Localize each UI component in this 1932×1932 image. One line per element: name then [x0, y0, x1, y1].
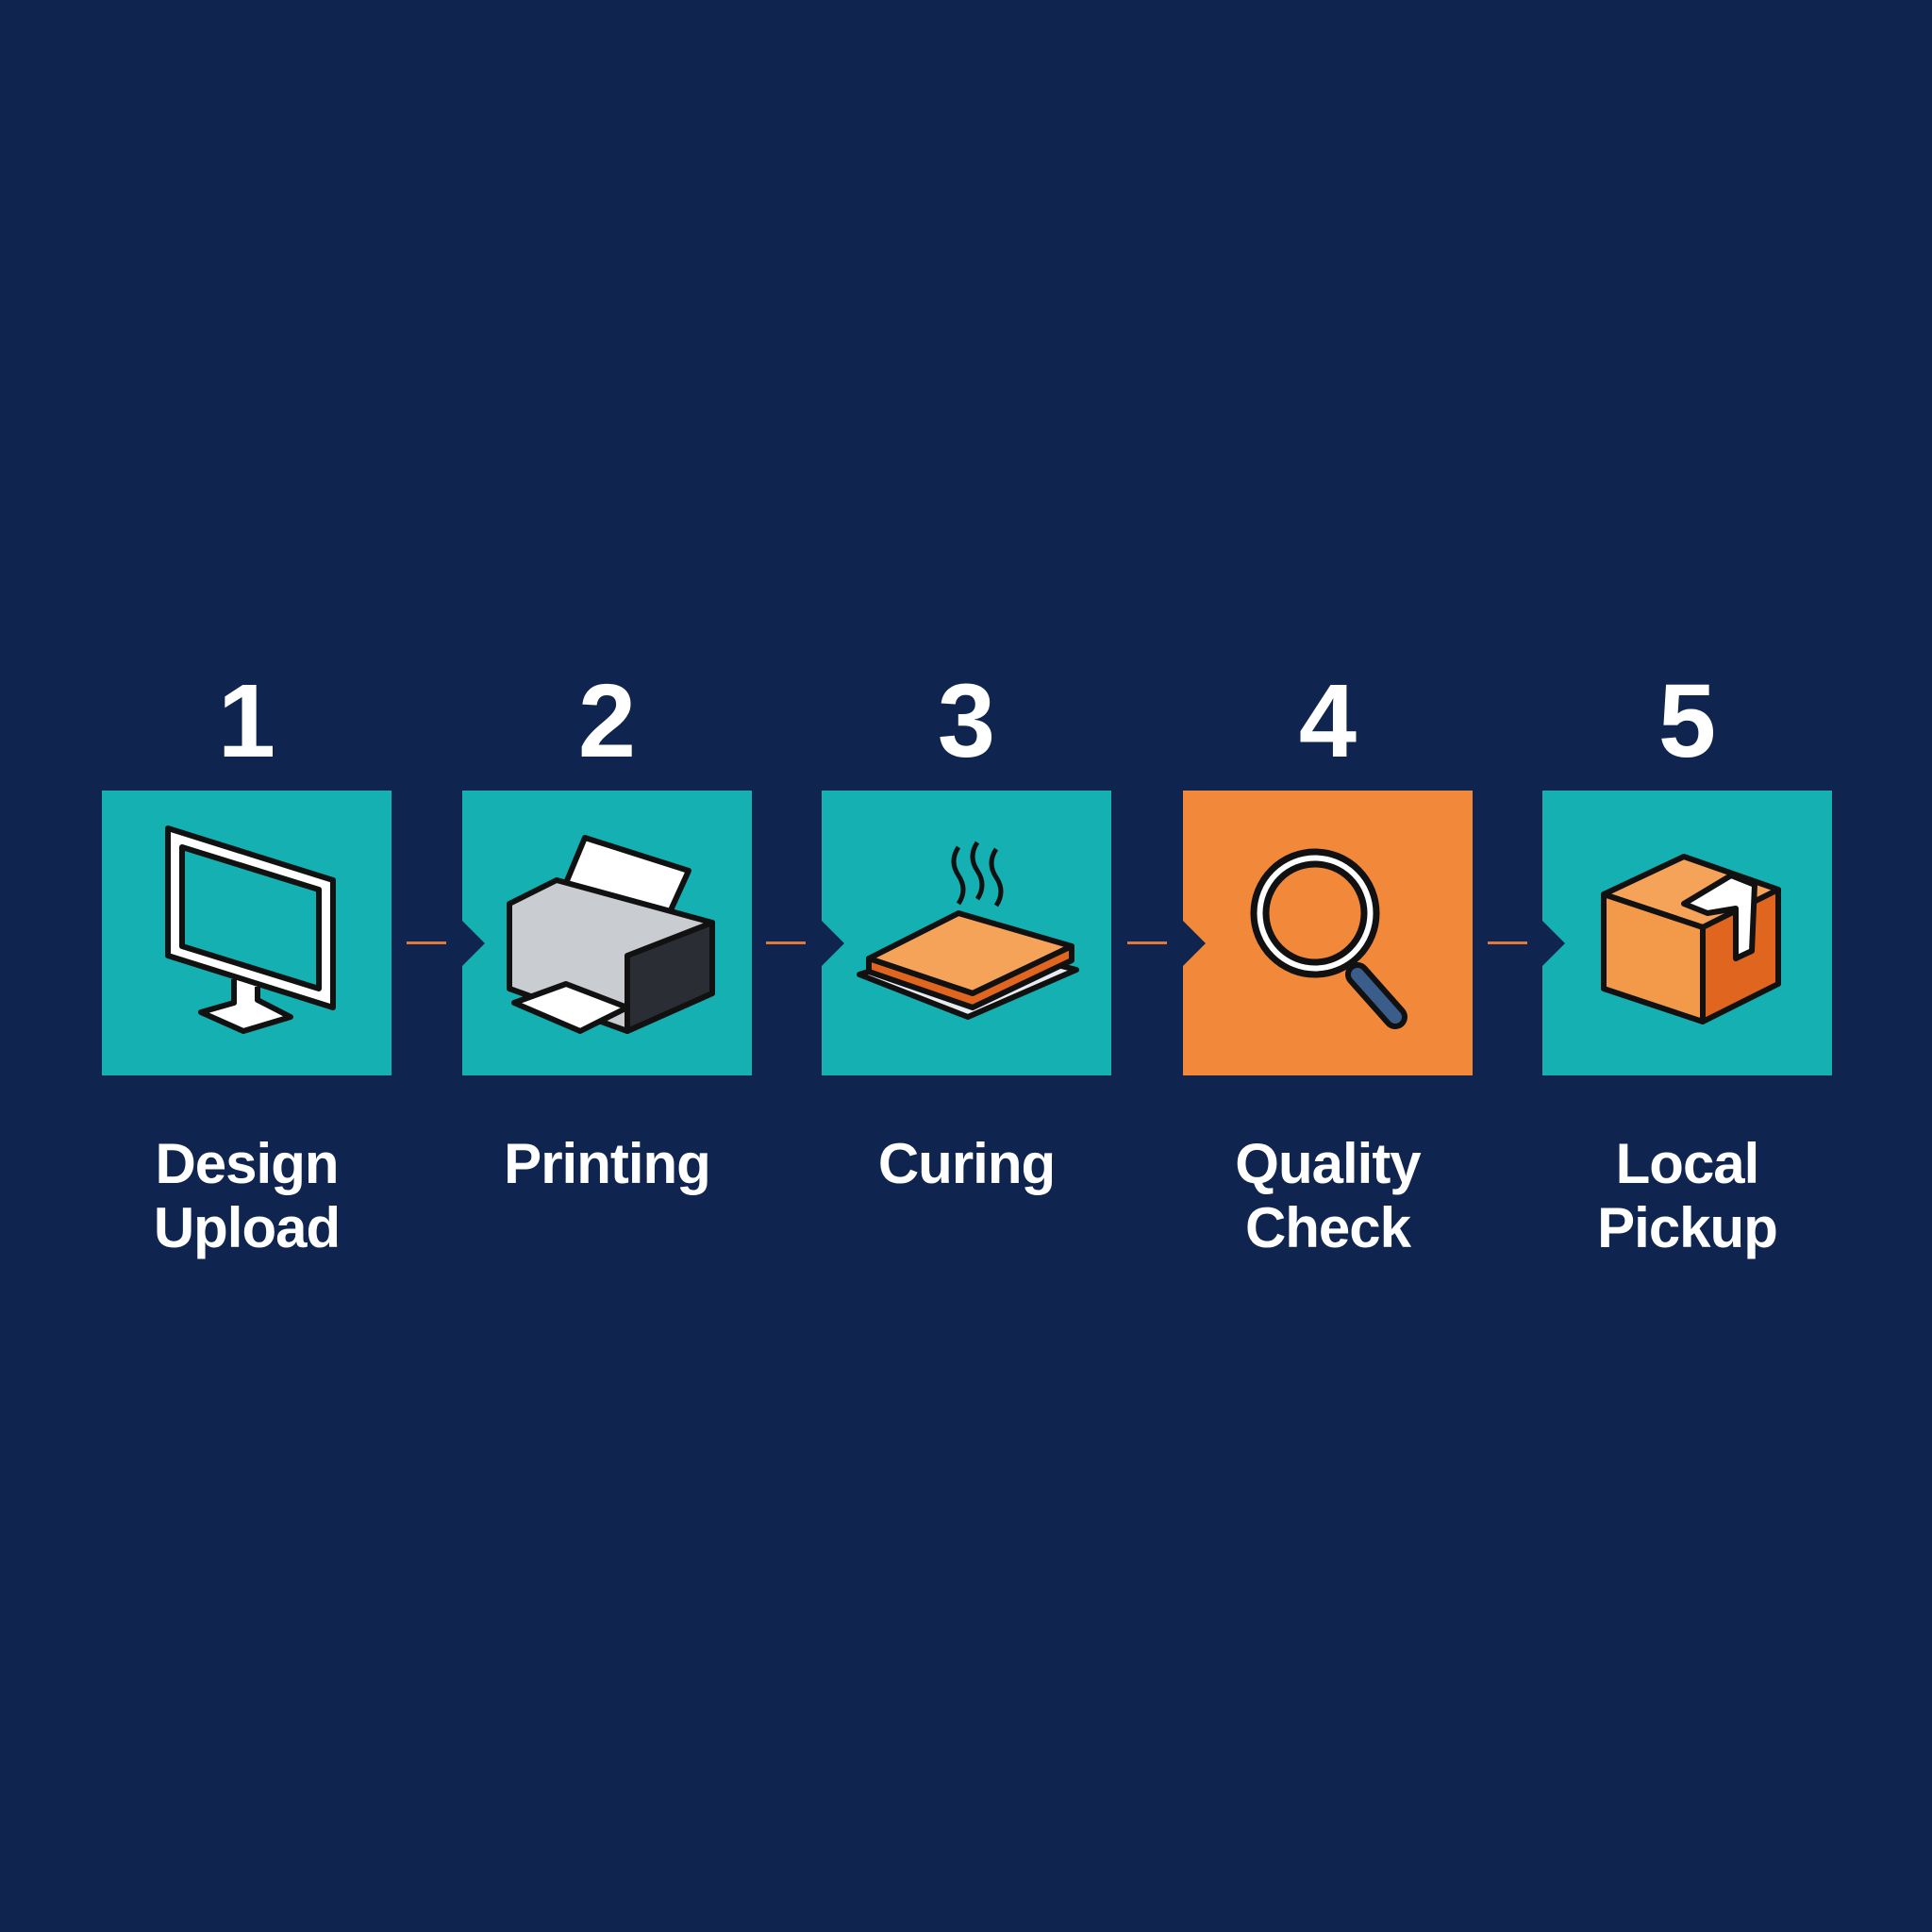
label: printing: Printing — [504, 1132, 710, 1195]
label: design upload: Upload — [154, 1196, 340, 1259]
label: quality check: Quality — [1235, 1132, 1421, 1195]
icon: heat press — [857, 841, 1079, 1020]
panel: design upload — [102, 791, 391, 1075]
step 1 number: 1 — [218, 663, 275, 779]
step 3 number: 3 — [938, 663, 995, 779]
icon: printer — [507, 835, 715, 1034]
label: quality check: Check — [1245, 1196, 1410, 1259]
panel: curing — [822, 791, 1111, 1075]
step 2 number: 2 — [578, 663, 636, 779]
step 4 number: 4 — [1299, 663, 1357, 779]
arrow 2-3 — [766, 941, 806, 944]
label: local pickup — [1597, 1132, 1777, 1259]
label: curing: Curing — [878, 1132, 1055, 1195]
label: quality check — [1235, 1132, 1421, 1259]
panel: printing — [462, 791, 752, 1075]
step 5 number: 5 — [1658, 663, 1716, 779]
label: local pickup: Local — [1616, 1132, 1758, 1195]
panel: local pickup — [1542, 791, 1832, 1075]
arrow 1-2 — [407, 941, 446, 944]
icon: box — [1601, 854, 1781, 1024]
panel: quality check — [1183, 791, 1473, 1075]
label: design upload: Design — [155, 1132, 339, 1195]
arrow 4-5 — [1488, 941, 1527, 944]
icon: magnifier — [1251, 849, 1407, 1029]
icon: monitor — [165, 825, 336, 1034]
arrow 3-4 — [1127, 941, 1167, 944]
label: local pickup: Pickup — [1597, 1196, 1777, 1259]
label: design upload — [154, 1132, 340, 1259]
